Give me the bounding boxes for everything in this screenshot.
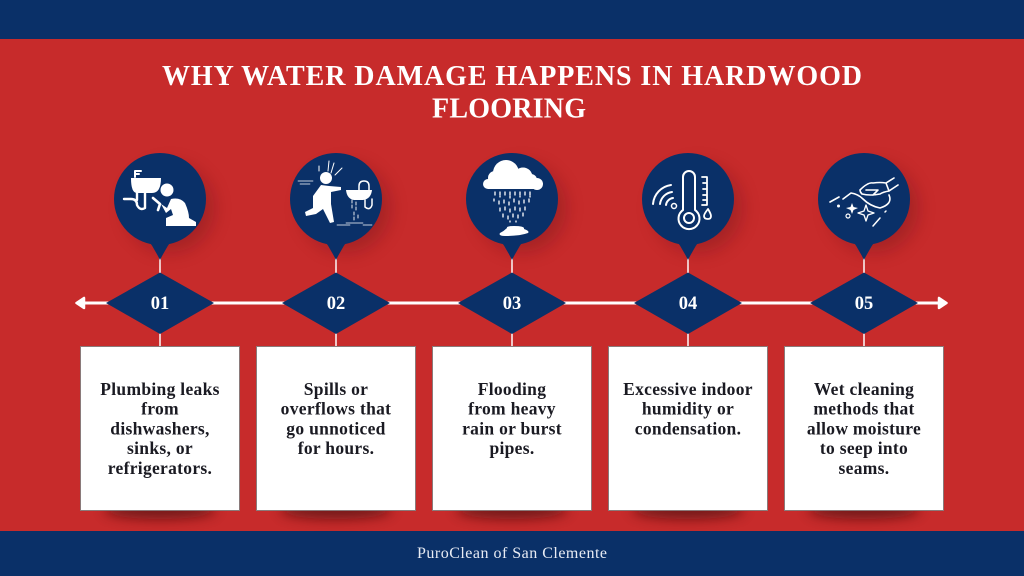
title: WHY WATER DAMAGE HAPPENS IN HARDWOOD	[162, 61, 862, 92]
card 2: overflows that	[281, 398, 391, 418]
diamond 02: 02	[327, 294, 345, 314]
step 1	[80, 153, 240, 519]
card 3	[432, 346, 592, 519]
card 3: Flooding	[478, 379, 546, 399]
timeline arrow	[76, 298, 946, 308]
pin 4	[642, 153, 742, 260]
card 2: for hours.	[298, 438, 374, 458]
card 4: condensation.	[635, 418, 741, 438]
footer text: PuroClean of San Clemente	[417, 545, 607, 562]
diamond 02	[282, 272, 390, 334]
card 5: Wet cleaning	[814, 379, 914, 399]
icon: plumber fixing sink	[124, 171, 196, 226]
diamond 01	[106, 272, 214, 334]
card 3: rain or burst	[462, 418, 562, 438]
card 1: from	[141, 398, 179, 418]
pin 2	[290, 153, 390, 260]
card 5: seams.	[839, 458, 889, 478]
icon: rain cloud and puddle	[483, 160, 543, 236]
card 4: Excessive indoor	[623, 379, 753, 399]
title: FLOORING	[432, 94, 586, 124]
card 5: to seep into	[820, 438, 908, 458]
card 1: Plumbing leaks	[100, 379, 220, 399]
top bar	[0, 0, 1024, 39]
diamond 01: 01	[151, 294, 169, 314]
step 4	[608, 153, 768, 519]
icon: person and overflowing sink	[298, 161, 372, 225]
diamond 04: 04	[679, 294, 697, 314]
pin 3	[466, 153, 566, 260]
pin 1	[114, 153, 214, 260]
card 1: refrigerators.	[108, 458, 212, 478]
step 3	[432, 153, 592, 519]
step 5	[784, 153, 944, 519]
card 3: from heavy	[468, 398, 556, 418]
footer bar	[0, 531, 1024, 576]
card 1: sinks, or	[127, 438, 193, 458]
card 1: dishwashers,	[110, 418, 210, 438]
title	[162, 61, 862, 124]
card 2: go unnoticed	[286, 418, 386, 438]
card 5	[784, 346, 944, 519]
card 4	[608, 346, 768, 519]
step 2	[256, 153, 416, 519]
icon: thermometer and humidity	[653, 171, 711, 229]
card 2	[256, 346, 416, 519]
diamond 04	[634, 272, 742, 334]
diamond 03: 03	[503, 294, 521, 314]
diamond 05	[810, 272, 918, 334]
card 3: pipes.	[489, 438, 535, 458]
pin 5	[818, 153, 918, 260]
diamond 05: 05	[855, 294, 873, 314]
card 2: Spills or	[304, 379, 368, 399]
icon: hand wiping with sparkles	[830, 178, 898, 226]
card 1	[80, 346, 240, 519]
card 4: humidity or	[642, 398, 734, 418]
diamond 03	[458, 272, 566, 334]
card 5: allow moisture	[807, 418, 921, 438]
card 5: methods that	[813, 398, 915, 418]
